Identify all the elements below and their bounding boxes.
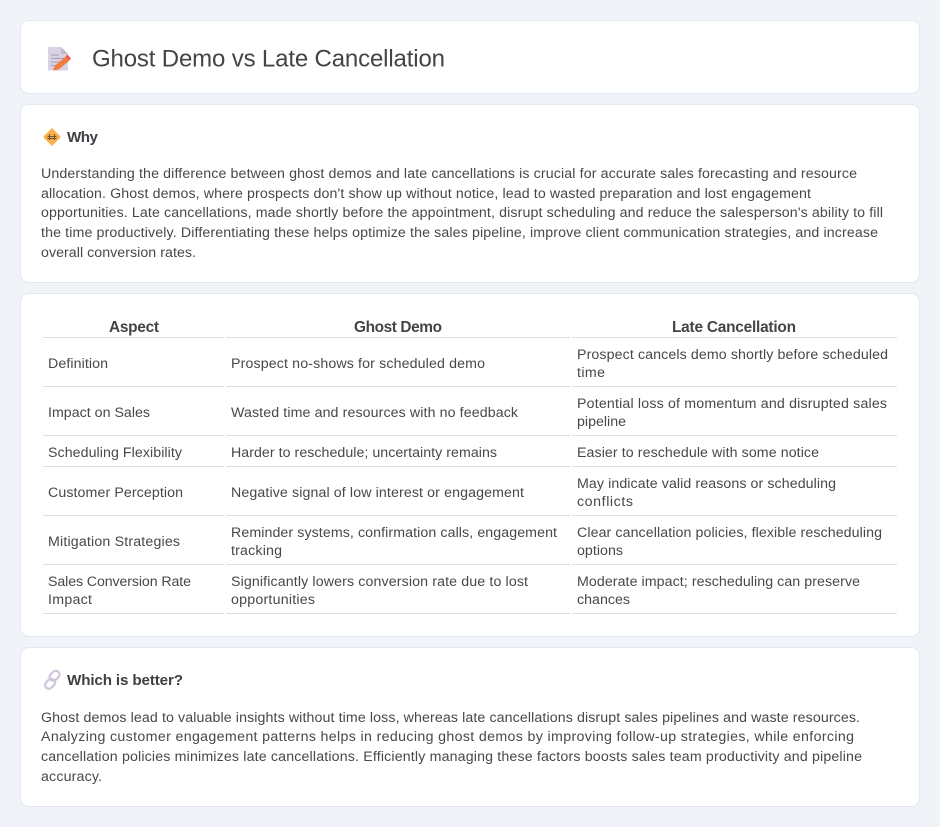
table header: Aspect	[109, 319, 159, 336]
row: definition	[48, 347, 888, 381]
heading: which is better: Which is better?	[67, 672, 183, 689]
row: mitigation strategies: Mitigation Strategies	[48, 534, 180, 550]
conclusion paragraph: cancellation policies minimizes late cancellations. Efficiently managing these factors boosts sales team productivity and pipeline	[41, 749, 862, 765]
row: sales conversion rate impact: Significantly lowers conversion rate due to lost	[231, 574, 528, 590]
row: mitigation strategies: options	[577, 543, 623, 559]
heading: why: Why	[67, 129, 99, 146]
panel: why	[20, 104, 920, 282]
row: impact on sales: pipeline	[577, 414, 626, 430]
icon: warning diamond	[44, 128, 60, 146]
row: sales conversion rate impact: opportunities	[231, 592, 315, 608]
conclusion paragraph: Analyzing customer engagement patterns helps in reducing ghost demos by improving follow-up strategies, while enforcing	[41, 729, 854, 745]
why paragraph: the time productively. Differentiating these helps optimize the sales pipeline, improve client communication strategies, and increase	[41, 225, 878, 241]
table header	[109, 319, 796, 336]
row: impact on sales: Wasted time and resources with no feedback	[231, 405, 519, 421]
row: mitigation strategies: Clear cancellation policies, flexible rescheduling	[577, 525, 882, 541]
row: customer perception	[48, 476, 836, 510]
row: sales conversion rate impact	[48, 574, 860, 608]
row: impact on sales: Potential loss of momentum and disrupted sales	[577, 396, 887, 412]
why paragraph: allocation. Ghost demos, where prospects don't show up without notice, lead to wasted preparation and lost engagement	[41, 186, 811, 202]
title: Ghost Demo vs Late Cancellation	[92, 46, 445, 72]
row: sales conversion rate impact: chances	[577, 592, 630, 608]
why paragraph: opportunities. Late cancellations, made shortly before the appointment, disrupt scheduling and reduce the salesperson's ability to fill	[41, 205, 883, 221]
row: scheduling flexibility: Harder to reschedule; uncertainty remains	[231, 445, 497, 461]
panel: comparison table	[20, 294, 920, 636]
panel: which is better	[20, 648, 920, 806]
icon: document with pencil	[48, 47, 71, 70]
row: customer perception: Customer Perception	[48, 485, 183, 501]
row: impact on sales: Impact on Sales	[48, 405, 150, 421]
row: sales conversion rate impact: Impact	[48, 592, 92, 608]
row: definition: Prospect cancels demo shortly before scheduled	[577, 347, 888, 363]
row: sales conversion rate impact: Moderate impact; rescheduling can preserve	[577, 574, 860, 590]
row: sales conversion rate impact: Sales Conversion Rate	[48, 574, 191, 590]
why paragraph	[41, 166, 883, 261]
row: mitigation strategies: Reminder systems, confirmation calls, engagement	[231, 525, 557, 541]
row: customer perception: May indicate valid reasons or scheduling	[577, 476, 836, 492]
why paragraph: Understanding the difference between ghost demos and late cancellations is crucial for accurate sales forecasting and resource	[41, 166, 857, 182]
row: impact on sales	[48, 396, 887, 430]
row: definition: Definition	[48, 356, 108, 372]
row: mitigation strategies	[48, 525, 882, 559]
icon: link	[43, 669, 61, 690]
row: definition: time	[577, 365, 605, 381]
conclusion paragraph: Ghost demos lead to valuable insights without time loss, whereas late cancellations disrupt sales pipelines and waste resources.	[41, 710, 860, 726]
row: scheduling flexibility: Easier to reschedule with some notice	[577, 445, 819, 461]
table header: Late Cancellation	[672, 319, 796, 336]
conclusion paragraph: accuracy.	[41, 769, 102, 785]
row: mitigation strategies: tracking	[231, 543, 282, 559]
row: scheduling flexibility: Scheduling Flexibility	[48, 445, 183, 461]
row: customer perception: Negative signal of low interest or engagement	[231, 485, 524, 501]
table header: Ghost Demo	[354, 319, 442, 336]
row: customer perception: conflicts	[577, 494, 633, 510]
row: definition: Prospect no-shows for scheduled demo	[231, 356, 485, 372]
row: scheduling flexibility	[48, 445, 819, 461]
why paragraph: overall conversion rates.	[41, 245, 196, 261]
conclusion paragraph	[41, 710, 862, 785]
header panel	[20, 20, 920, 94]
